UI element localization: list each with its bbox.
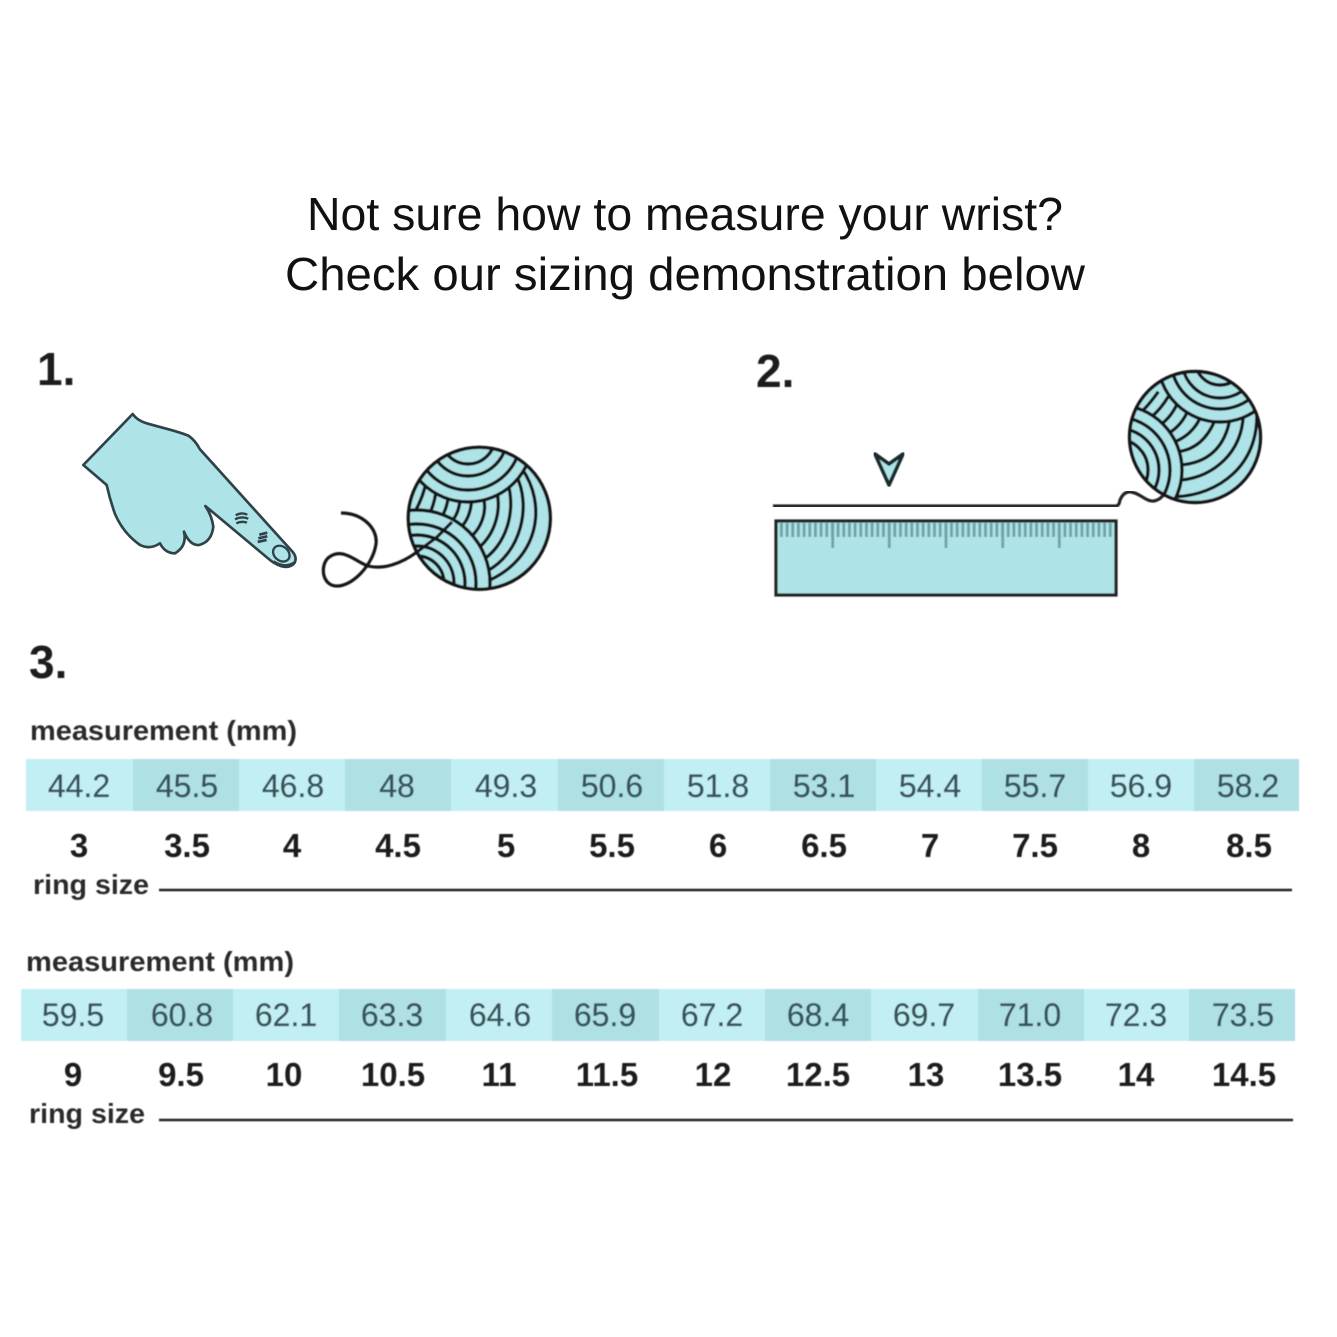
- table 1: ring size row: 6: [709, 827, 727, 864]
- icon: yarn ball with loose thread: [320, 444, 553, 592]
- table 1: measurement row: 53.1: [793, 768, 855, 804]
- table 1: ring size row: 4: [283, 827, 302, 864]
- infographic: [20, 196, 1300, 1130]
- table 2: measurement row: 62.1: [255, 997, 317, 1033]
- title: Not sure how to measure your wrist?: [307, 188, 1063, 240]
- table 1: measurement row: [26, 759, 1299, 811]
- table 2: ring size row: 11.5: [576, 1056, 638, 1093]
- icon: arrow marker: [875, 454, 903, 485]
- table 2: ring size row: 12: [695, 1056, 731, 1093]
- table 2: ring size row: 12.5: [786, 1056, 850, 1093]
- table 1: measurement row: 51.8: [687, 768, 749, 804]
- table 1: ring size label and rule: ring size: [33, 869, 149, 900]
- table 1: ring size row: 5: [497, 827, 515, 864]
- table 2: ring size row: 9: [64, 1056, 82, 1093]
- table 1: measurement row: 58.2: [1217, 768, 1279, 804]
- table 1: measurement row: 49.3: [475, 768, 537, 804]
- table 1: ring size row: 3: [70, 827, 88, 864]
- icon: ruler: [776, 521, 1116, 595]
- table 2: measurement row: 65.9: [574, 997, 636, 1033]
- table 2: measurement row: 68.4: [787, 997, 849, 1033]
- table 2: ring size row: 14: [1118, 1056, 1155, 1093]
- icon: hand pointing: [83, 414, 296, 567]
- table 1: measurement row: 56.9: [1110, 768, 1172, 804]
- table 2: measurement row: 71.0: [999, 997, 1061, 1033]
- table 1: measurement heading: measurement (mm): [30, 715, 297, 746]
- table 1: ring size row: 7: [921, 827, 939, 864]
- step 2 number: 2.: [756, 345, 794, 397]
- table 2: measurement row: 72.3: [1105, 997, 1167, 1033]
- step 3 number: 3.: [29, 636, 67, 688]
- table 2: measurement row: 69.7: [893, 997, 955, 1033]
- table 2: measurement row: 64.6: [469, 997, 531, 1033]
- table 2: ring size label and rule: ring size: [29, 1098, 145, 1129]
- table 2: ring size row: 13: [908, 1056, 944, 1093]
- table 2: measurement row: 63.3: [361, 997, 423, 1033]
- table 2: measurement heading: measurement (mm): [26, 946, 294, 977]
- table 2: measurement row: 67.2: [681, 997, 743, 1033]
- table 2: ring size row: 14.5: [1212, 1056, 1276, 1093]
- table 1: ring size row: 6.5: [801, 827, 847, 864]
- table 1: ring size row: 7.5: [1012, 827, 1058, 864]
- icon: thread laid along ruler: [773, 492, 1164, 506]
- table 2: ring size row: 9.5: [158, 1056, 204, 1093]
- table 1: ring size row: 8: [1132, 827, 1150, 864]
- table 1: ring size row: 5.5: [589, 827, 635, 864]
- table 1: measurement row: 44.2: [48, 768, 110, 804]
- table 2: measurement row: [21, 989, 1295, 1041]
- table 2: measurement row: 59.5: [42, 997, 104, 1033]
- table 2: ring size row: 10: [266, 1056, 302, 1093]
- table 1: measurement row: 48: [379, 768, 415, 804]
- table 2: measurement row: 60.8: [151, 997, 213, 1033]
- title: Check our sizing demonstration below: [285, 248, 1086, 300]
- title: [285, 188, 1086, 300]
- table 1: ring size row: 4.5: [375, 827, 421, 864]
- table 2: ring size row: 13.5: [998, 1056, 1062, 1093]
- table 1: ring size row: 8.5: [1226, 827, 1272, 864]
- table 1: measurement row: 45.5: [156, 768, 218, 804]
- icon: yarn ball: [1127, 368, 1263, 506]
- step 1 number: 1.: [37, 343, 75, 395]
- table 1: ring size row: [70, 827, 1272, 864]
- table 2: ring size row: 10.5: [361, 1056, 425, 1093]
- table 1: ring size row: 3.5: [164, 827, 210, 864]
- table 2: ring size row: 11: [482, 1056, 516, 1093]
- table 1: measurement row: 55.7: [1004, 768, 1066, 804]
- table 2: measurement row: 73.5: [1212, 997, 1274, 1033]
- table 1: measurement row: 50.6: [581, 768, 643, 804]
- table 1: measurement row: 46.8: [262, 768, 324, 804]
- table 2: ring size row: [64, 1056, 1276, 1093]
- table 1: measurement row: 54.4: [899, 768, 961, 804]
